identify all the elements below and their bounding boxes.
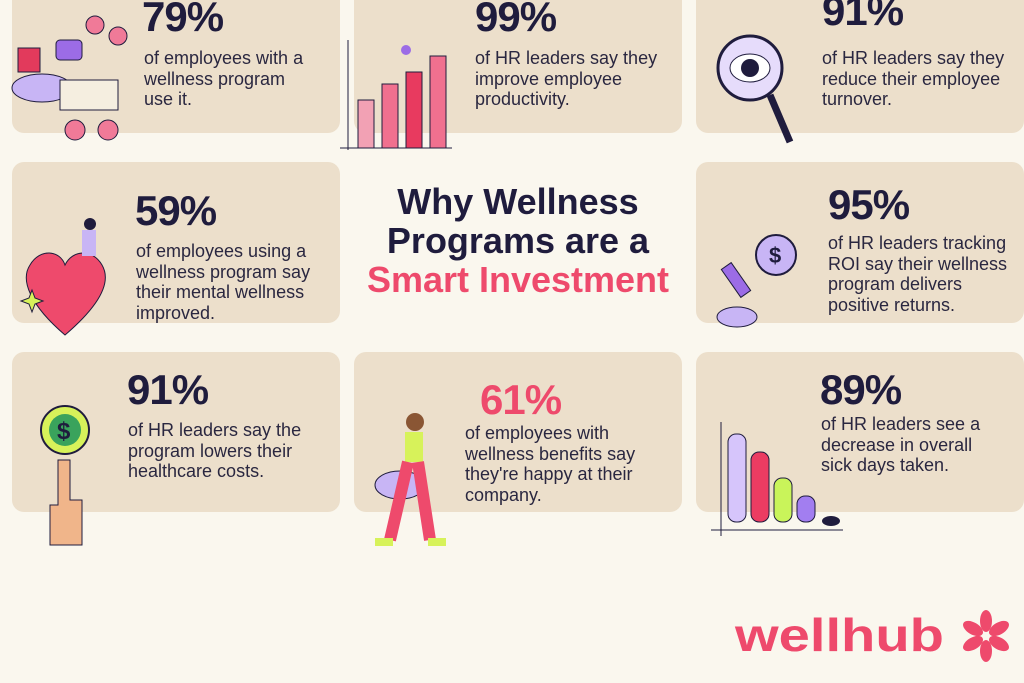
icon: fitness items	[12, 16, 128, 140]
icon: woman walking	[374, 413, 446, 546]
card: 99%	[354, 0, 682, 133]
text 79: of employees with a	[144, 48, 303, 68]
icon: heart	[20, 218, 106, 336]
title	[367, 181, 669, 300]
text 59: of employees using a	[136, 241, 306, 261]
stat 95: 95%	[828, 181, 909, 228]
icon: coins: $	[769, 243, 781, 268]
icon: magnifier eye	[716, 34, 794, 144]
text 95	[828, 233, 1007, 315]
text 79	[144, 48, 304, 109]
text 91 b	[128, 420, 301, 481]
text 89	[821, 414, 980, 475]
logo: wellhub	[735, 609, 944, 661]
text 91 a	[822, 48, 1004, 109]
stat 61: 61%	[480, 376, 561, 423]
card: 91% healthcare	[12, 352, 340, 512]
icon: coin hand: $	[57, 418, 71, 445]
text 61: company.	[465, 484, 542, 504]
text 99: productivity.	[475, 89, 570, 109]
card: 89%	[696, 352, 1024, 512]
icon: coin hand	[40, 405, 90, 546]
text 91 a: turnover.	[822, 89, 892, 109]
text 59: improved.	[136, 302, 215, 322]
icon: decreasing bars	[711, 422, 843, 536]
card: 59%	[12, 162, 340, 323]
text 89: of HR leaders see a	[821, 414, 980, 434]
title: Why Wellness	[397, 181, 639, 222]
text 95: of HR leaders tracking	[828, 233, 1006, 253]
text 61	[465, 423, 636, 505]
stat 89: 89%	[820, 366, 901, 413]
text 95: program delivers	[828, 274, 962, 294]
text 61: they're happy at their	[465, 464, 633, 484]
text 59	[136, 241, 310, 323]
text 91 a: reduce their employee	[822, 68, 1000, 88]
icon: coins	[716, 234, 797, 328]
text 99: improve employee	[475, 68, 622, 88]
icon: logo flower	[963, 610, 1009, 662]
text 91 b: healthcare costs.	[128, 461, 264, 481]
text 89: decrease in overall	[821, 434, 972, 454]
card: 79%	[12, 0, 340, 133]
stat 91 b: 91%	[127, 366, 208, 413]
text 91 b: of HR leaders say the	[128, 420, 301, 440]
text 89: sick days taken.	[821, 455, 949, 475]
text 99: of HR leaders say they	[475, 48, 657, 68]
text 61: of employees with	[465, 423, 609, 443]
text 79: use it.	[144, 89, 192, 109]
title: Smart Investment	[367, 259, 669, 300]
text 59: their mental wellness	[136, 282, 304, 302]
text 61: wellness benefits say	[465, 444, 635, 464]
text 79: wellness program	[144, 68, 285, 88]
text 59: wellness program say	[136, 262, 310, 282]
text 99	[475, 48, 658, 109]
icon: bar chart growth	[340, 40, 452, 150]
text 91 b: program lowers their	[128, 440, 292, 460]
stat 59: 59%	[135, 187, 216, 234]
text 95: ROI say their wellness	[828, 254, 1007, 274]
text 91 a: of HR leaders say they	[822, 48, 1004, 68]
title: Programs are a	[387, 220, 649, 261]
card: 61%	[354, 352, 682, 512]
card: 91% turnover	[696, 0, 1024, 133]
card: 95%	[696, 162, 1024, 323]
text 95: positive returns.	[828, 294, 955, 314]
